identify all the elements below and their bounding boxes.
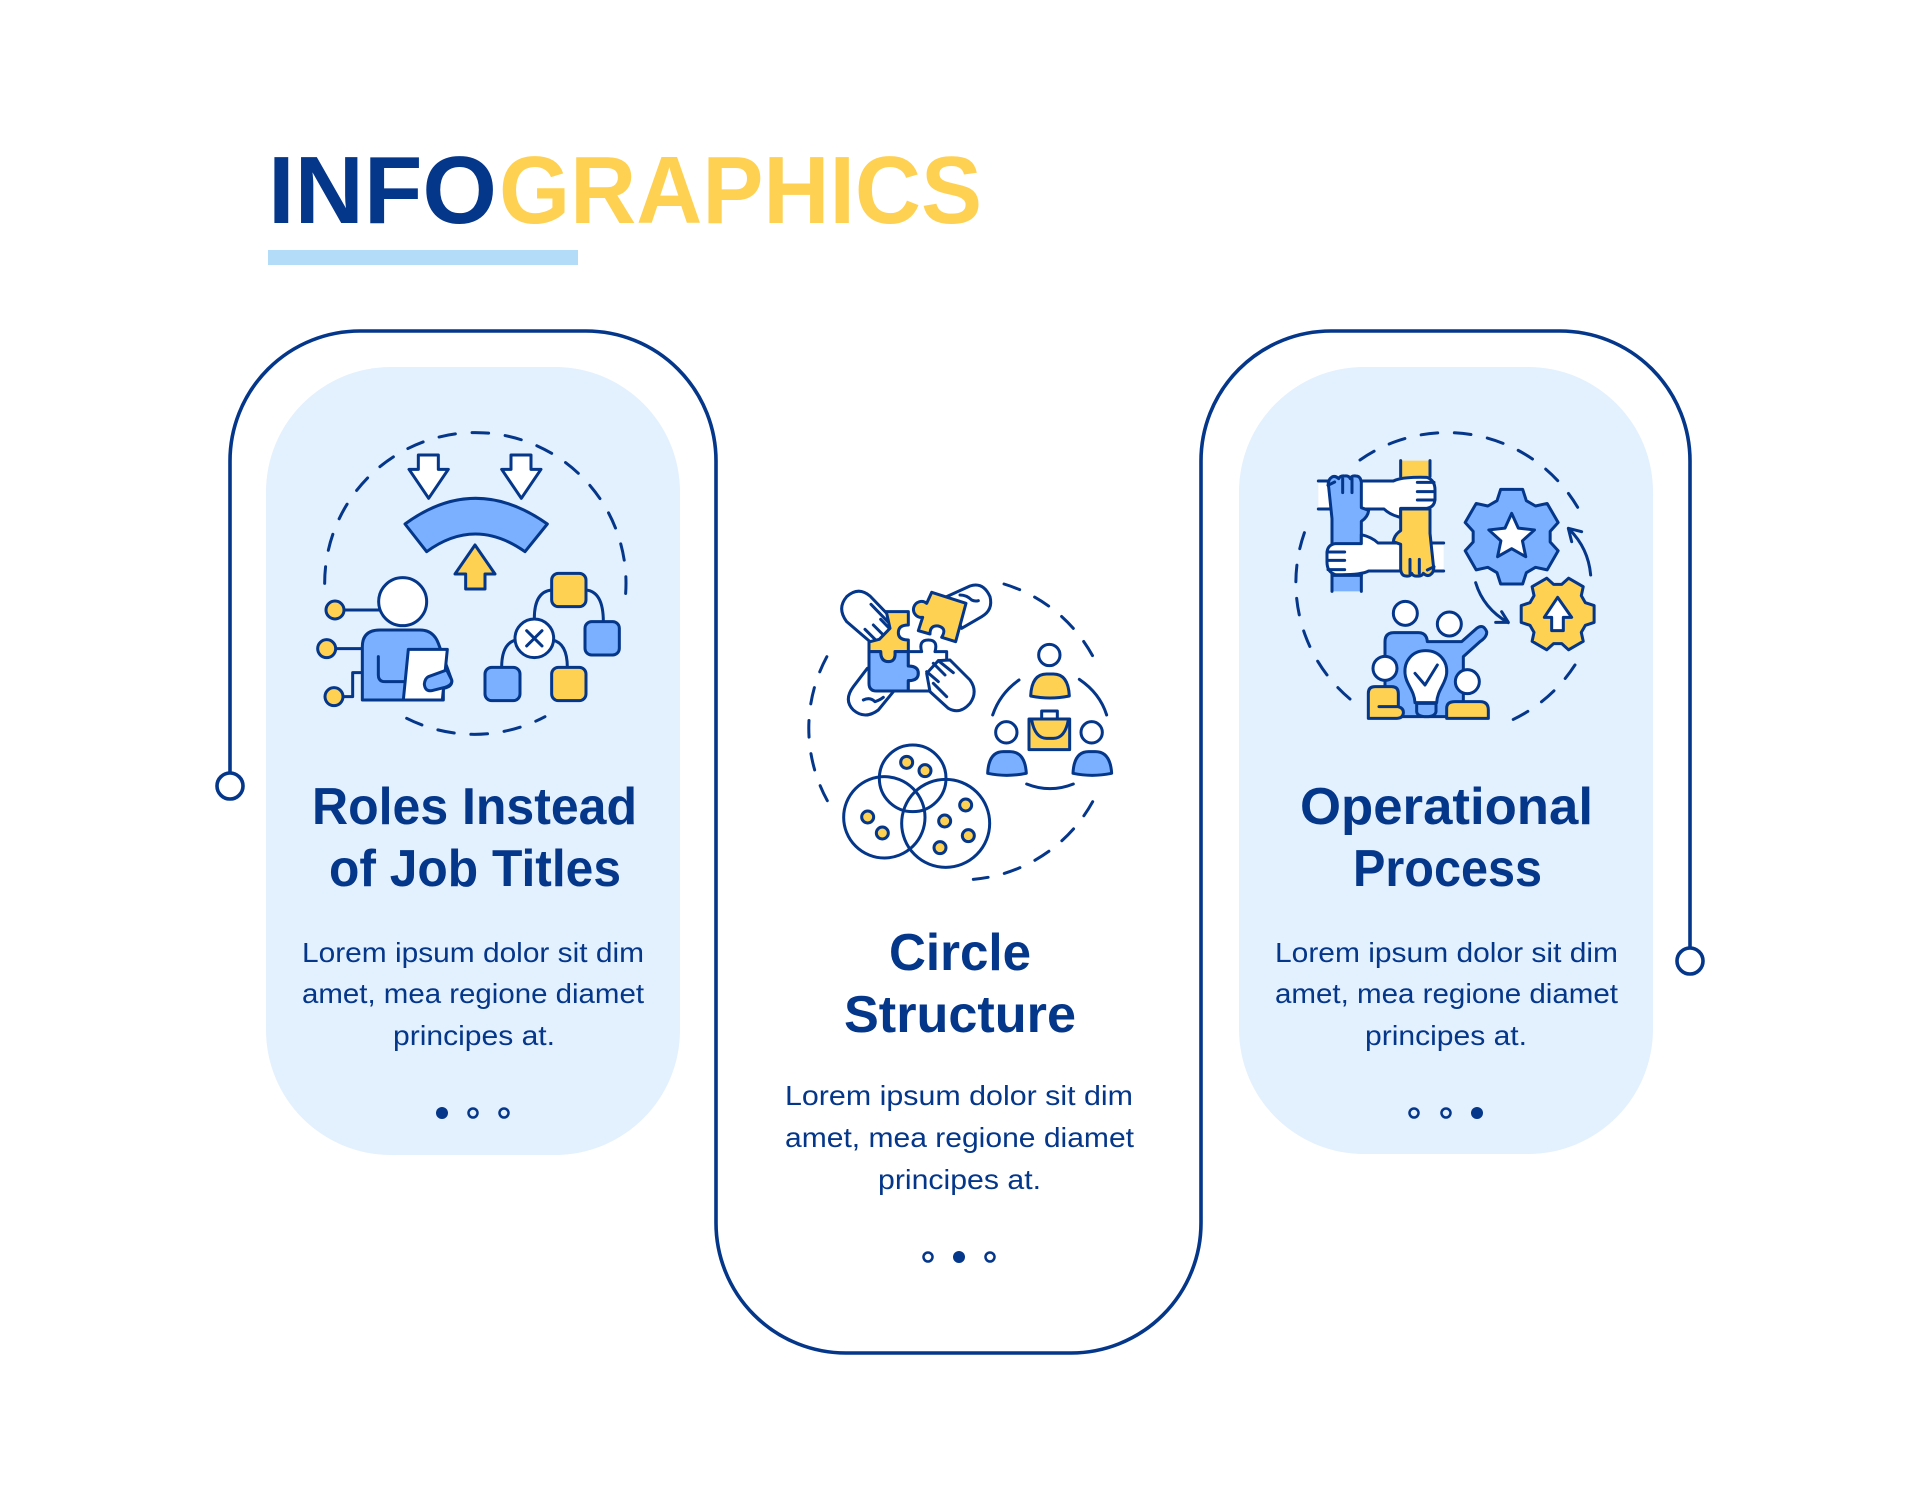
body text — [302, 937, 644, 1051]
heading: circle structure: Circle — [889, 924, 1031, 982]
panel: circle structure — [785, 584, 1134, 1263]
body text: Lorem ipsum dolor sit dim — [1275, 937, 1618, 968]
heading: operational process — [1300, 778, 1593, 898]
body text: amet, mea regione diamet — [1275, 978, 1618, 1009]
heading: roles instead of job titles: Roles Instead — [312, 778, 637, 836]
body text: principes at. — [393, 1020, 555, 1051]
title underline — [268, 250, 578, 265]
icon: operational process — [1296, 433, 1607, 722]
step dots — [1410, 1107, 1483, 1119]
body text: Lorem ipsum dolor sit dim — [785, 1080, 1133, 1111]
body text: principes at. — [1365, 1020, 1527, 1051]
title: GRAPHICS — [499, 137, 982, 244]
heading: roles instead of job titles: of Job Titles — [329, 840, 621, 898]
heading: circle structure — [844, 924, 1076, 1044]
body text: amet, mea regione diamet — [302, 978, 644, 1009]
title: INFO — [268, 137, 497, 244]
icon: roles — [318, 433, 626, 734]
panel: roles instead of job titles — [266, 367, 680, 1155]
body text: Lorem ipsum dolor sit dim — [302, 937, 644, 968]
icon: circle structure — [809, 584, 1112, 879]
connector outline — [217, 331, 1703, 1353]
body text: amet, mea regione diamet — [785, 1122, 1134, 1153]
heading: operational process: Operational — [1300, 778, 1593, 836]
panel: operational process — [1239, 367, 1653, 1154]
heading: circle structure: Structure — [844, 986, 1076, 1044]
step dots — [924, 1251, 994, 1263]
body text: principes at. — [878, 1164, 1041, 1195]
body text — [785, 1080, 1134, 1195]
body text — [1275, 937, 1618, 1051]
heading: roles instead of job titles — [312, 778, 637, 898]
heading: operational process: Process — [1353, 840, 1542, 898]
step dots — [436, 1107, 508, 1119]
title — [268, 137, 982, 244]
